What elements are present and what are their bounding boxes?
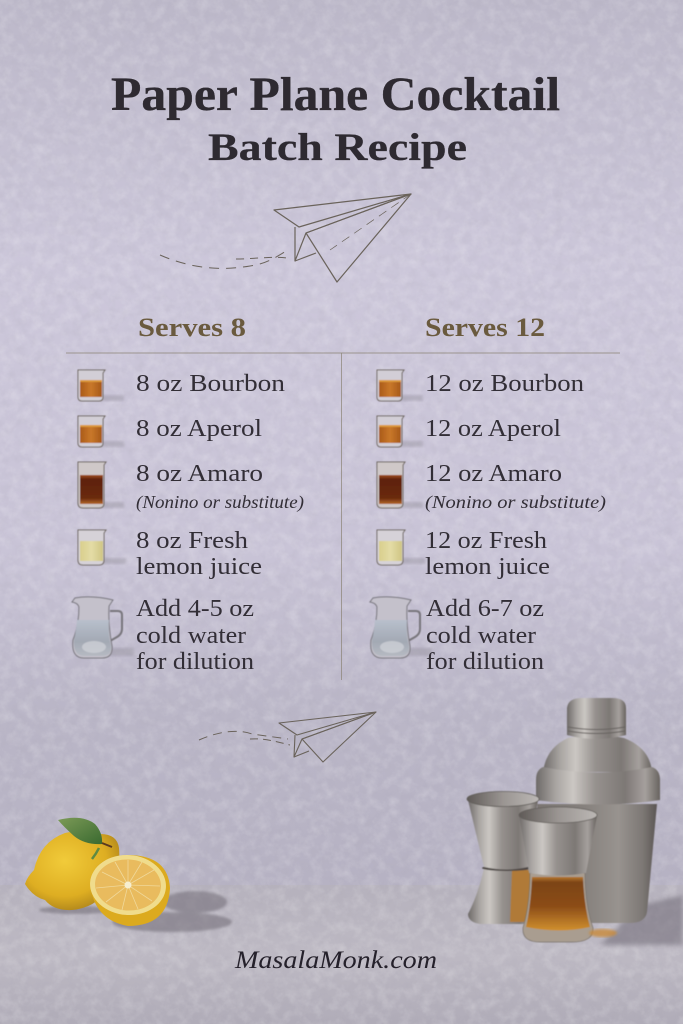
text: lemon juice: lemon juice bbox=[425, 554, 550, 580]
text: amaro note: (Nonino or substitute) bbox=[136, 492, 304, 512]
footer: website: MasalaMonk.com bbox=[234, 947, 437, 974]
text: bourbon: 12 oz Bourbon bbox=[425, 371, 584, 397]
icon: aperol glass bbox=[78, 416, 124, 447]
title: Paper Plane Cocktail bbox=[111, 68, 560, 121]
title bbox=[111, 68, 560, 169]
text: water dilution: cold water bbox=[426, 623, 536, 649]
text: water dilution: cold water bbox=[136, 623, 246, 649]
text: water dilution: for dilution bbox=[136, 649, 254, 675]
icon: water pitcher bbox=[370, 597, 432, 658]
icon: lemon juice glass bbox=[377, 530, 425, 565]
icon: bourbon glass bbox=[377, 370, 423, 401]
table shadow bbox=[600, 895, 683, 945]
column heading: Serves 12: Serves 12 bbox=[425, 313, 545, 342]
text: water dilution bbox=[426, 596, 544, 675]
text: amaro note: (Nonino or substitute) bbox=[425, 492, 606, 513]
panel: serves 8 ingredients bbox=[72, 370, 304, 675]
text: lemon juice: 12 oz Fresh bbox=[425, 528, 547, 554]
text: water dilution: for dilution bbox=[426, 649, 544, 675]
illustration: lemons bbox=[25, 818, 232, 932]
icon: paper plane bottom bbox=[199, 712, 376, 762]
icon: amaro glass bbox=[377, 462, 423, 508]
lemon shadows bbox=[39, 891, 232, 932]
icon: aperol glass bbox=[377, 416, 423, 447]
text: lemon juice bbox=[425, 528, 550, 580]
title: Batch Recipe bbox=[208, 126, 467, 169]
lemon leaf bbox=[58, 818, 112, 859]
text: lemon juice: 8 oz Fresh bbox=[136, 528, 248, 554]
table surface bbox=[0, 885, 683, 1024]
text: aperol: 8 oz Aperol bbox=[136, 416, 262, 442]
panel: serves 12 ingredients bbox=[370, 370, 606, 675]
shaker bbox=[536, 698, 660, 923]
icon: lemon juice glass bbox=[78, 530, 126, 565]
column heading: Serves 8: Serves 8 bbox=[138, 313, 246, 342]
text: bourbon: 8 oz Bourbon bbox=[136, 371, 285, 397]
text: water dilution: Add 4-5 oz bbox=[136, 596, 254, 622]
text: aperol: 12 oz Aperol bbox=[425, 416, 561, 442]
icon: paper plane top bbox=[160, 194, 411, 282]
text: water dilution: Add 6-7 oz bbox=[426, 596, 544, 622]
text: lemon juice: lemon juice bbox=[136, 554, 262, 580]
text: water dilution bbox=[136, 596, 254, 675]
whole lemon bbox=[25, 831, 119, 910]
icon: bourbon glass bbox=[78, 370, 124, 401]
text: lemon juice bbox=[136, 528, 262, 580]
lemon half bbox=[88, 852, 170, 926]
icon: water pitcher bbox=[72, 597, 134, 658]
front jigger bbox=[519, 807, 597, 942]
rear jigger bbox=[467, 792, 540, 924]
text: amaro: 12 oz Amaro bbox=[425, 461, 562, 487]
text: amaro: 8 oz Amaro bbox=[136, 461, 263, 487]
illustration: shaker and jiggers bbox=[467, 698, 683, 945]
icon: amaro glass bbox=[78, 462, 124, 508]
amber reflection bbox=[589, 929, 617, 937]
